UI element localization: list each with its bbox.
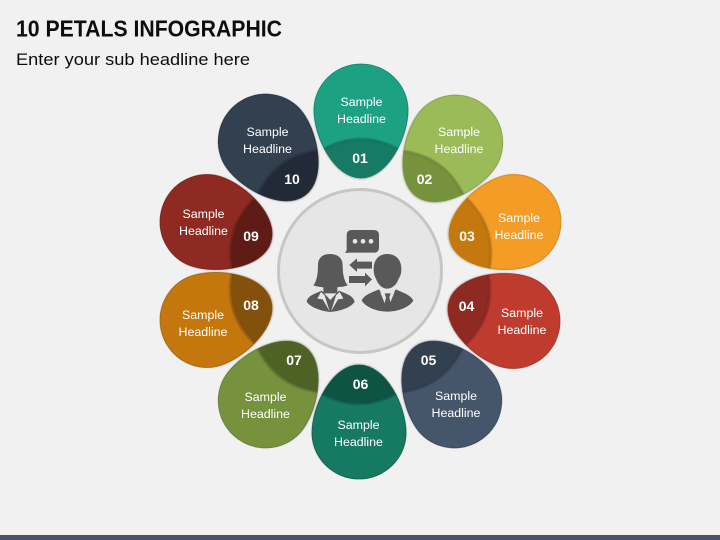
title: 10 PETALS INFOGRAPHIC [16,16,282,42]
petal 07: Sample [244,390,287,404]
icon: left arrow [349,258,372,272]
petal 09: Headline [179,224,228,238]
icon: woman [307,254,355,312]
petal 04: 04 [459,298,474,314]
petal 01: Headline [337,112,386,126]
petal 07: Headline [241,407,290,421]
petal 02: Headline [435,142,484,156]
icon: right arrow [349,273,372,286]
petal 05: 05 [421,352,436,368]
petal 03: Headline [495,228,544,242]
footer bar [0,535,720,540]
petal 01 [313,64,409,180]
petal 05: Sample [435,389,477,403]
petal 03: Sample [498,211,540,225]
petal 03 [447,174,562,271]
petal 06: 06 [353,376,368,392]
petal 07: 07 [286,352,302,368]
petal 04: Sample [501,306,543,320]
icon: two people talking [307,230,413,312]
petal 10: Sample [246,125,289,139]
petal 09: 09 [243,228,259,244]
petal 08: Sample [182,308,224,322]
petal 02 [401,94,504,204]
petal 02: Sample [438,125,480,139]
petal 01: Sample [340,95,383,109]
petal 06: Sample [337,418,380,432]
icon: man [362,254,413,312]
petal 03: 03 [459,228,475,244]
petal 05: Headline [432,406,481,420]
petal 01: 01 [352,150,368,166]
petal 06 [311,363,407,480]
petal 07 [218,339,320,449]
petal 10: Headline [243,142,292,156]
petal 10 [218,93,320,203]
petal 08: Headline [179,325,228,339]
petal 05 [400,339,502,449]
icon: speech bubble [345,230,379,253]
petal 08: 08 [243,297,259,313]
petal 09: Sample [182,207,225,221]
petal 04: Headline [498,323,547,337]
petal 02: 02 [417,171,432,187]
petal 04 [446,272,561,370]
subtitle: Enter your sub headline here [16,51,250,69]
petal 06: Headline [334,435,383,449]
centre circle [278,190,442,352]
petal 10: 10 [284,171,300,187]
petal 09 [159,174,274,271]
petal 08 [159,271,274,368]
